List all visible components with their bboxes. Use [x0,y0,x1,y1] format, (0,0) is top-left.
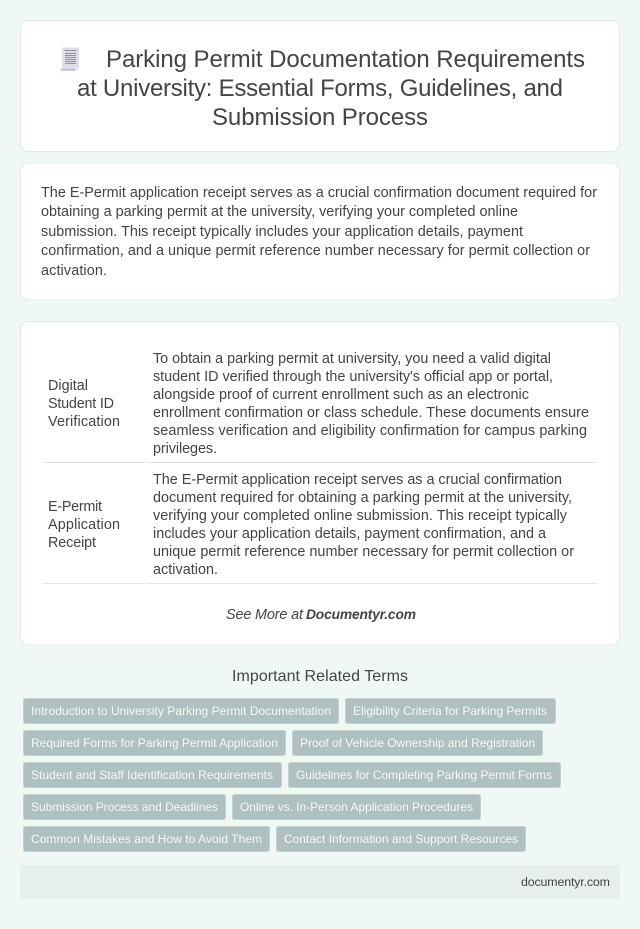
table row: e-permit application receipt [48,472,574,578]
row description: To obtain a parking permit at university, you need a valid digital [153,351,551,367]
icon: document scroll [60,48,79,71]
tag [288,762,560,788]
row label: Student ID [48,396,114,412]
row description: privileges. [153,441,217,457]
row description: includes your application details, payment confirmation, and a [153,526,546,542]
text block: summary [41,185,597,279]
tag list: related terms [24,698,560,852]
tag: Guidelines for Completing Parking Permit Forms [296,768,552,782]
row label: Receipt [48,535,96,551]
see more link: Documentyr.com [306,607,416,622]
text block: summary: activation. [41,263,107,279]
row label: Verification [48,414,120,430]
row description: student ID verified through the university's official app or portal, [153,369,553,385]
title: at University: Essential Forms, Guidelines, and [77,75,563,102]
row description: document required for obtaining a parking permit at the university, [153,490,572,506]
tag [24,762,282,788]
row description: seamless verification and eligibility confirmation for campus parking [153,423,587,439]
footer [20,865,620,899]
text block: summary: confirmation, and a unique permit reference number necessary for permit collection or [41,243,590,259]
row description: enrollment confirmation or class schedule. These documents ensure [153,405,589,421]
row description: unique permit reference number necessary for permit collection or [153,544,574,560]
row description: activation. [153,562,218,578]
row label: Application [48,517,120,533]
tag [24,698,338,724]
row description: The E-Permit application receipt serves as a crucial confirmation [153,472,562,488]
see more link [226,607,416,623]
row label: E-Permit [48,499,102,515]
tag [24,826,270,852]
tag: Submission Process and Deadlines [31,800,218,814]
panel: requirements table [20,322,620,645]
tag [24,794,226,820]
tag [232,794,480,820]
tag: Introduction to University Parking Permit Documentation [31,704,331,718]
footer: documentyr.com [521,875,610,889]
text block: summary: obtaining a parking permit at the university, verifying your completed online [41,204,518,220]
text block: summary: The E-Permit application receipt serves as a crucial confirmation document required for [41,185,597,201]
tag: Proof of Vehicle Ownership and Registration [300,736,535,750]
title [77,46,585,131]
row description: alongside proof of current enrollment such as an electronic [153,387,529,403]
row description [153,351,589,457]
heading: important related terms: Important Related Terms [232,668,408,685]
row label: Digital [48,378,88,394]
tag: Eligibility Criteria for Parking Permits [353,704,547,718]
tag: Contact Information and Support Resources [284,832,518,846]
title: Submission Process [212,104,428,131]
table row: digital student ID verification [48,351,589,457]
text block: summary: submission. This receipt typically includes your application details, payment [41,224,523,240]
row label [48,378,120,430]
see more link: See More at [226,607,304,623]
tag: Required Forms for Parking Permit Application [31,736,278,750]
tag [24,730,286,756]
tag: Student and Staff Identification Requirements [31,768,273,782]
row description [153,472,574,578]
tag [292,730,542,756]
panel: summary paragraph [20,163,620,300]
tag: Common Mistakes and How to Avoid Them [31,832,262,846]
tag [346,698,556,724]
title: Parking Permit Documentation Requirements [106,46,585,73]
row description: verifying your completed online submission. This receipt typically [153,508,568,524]
tag: Online vs. In-Person Application Procedures [240,800,473,814]
tag [276,826,526,852]
panel: header [20,20,620,152]
row label [48,499,120,551]
